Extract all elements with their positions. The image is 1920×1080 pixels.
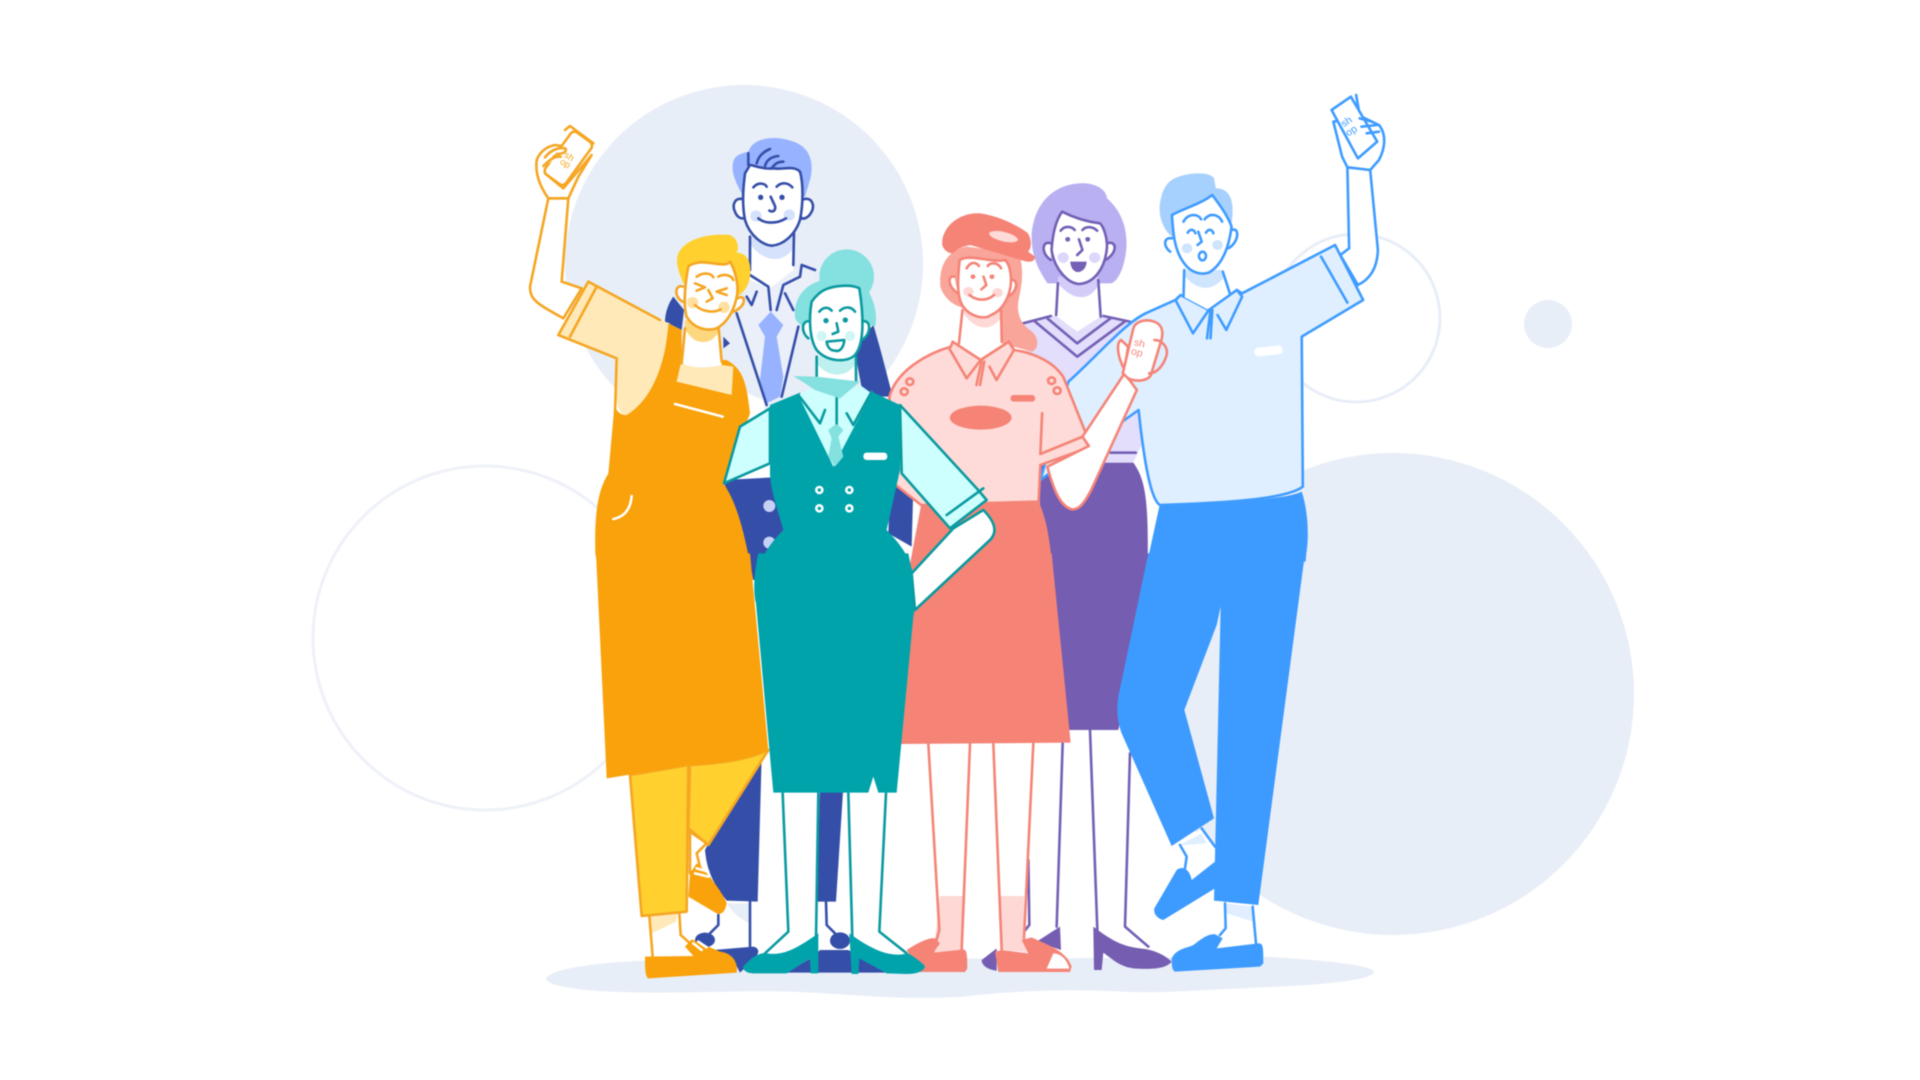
phone label: sh — [562, 150, 576, 163]
phone label: sh — [1339, 115, 1355, 130]
phone label: op — [1344, 124, 1360, 139]
phone label: op — [558, 156, 572, 170]
person: woman in purple skirt (back) — [982, 183, 1172, 971]
background circle: right filled — [1152, 453, 1634, 935]
background circle: small dot — [1524, 300, 1572, 348]
phone label: sh — [1133, 337, 1146, 351]
phone label: op — [1130, 346, 1144, 360]
person: woman in coral skirt holding phone — [889, 213, 1167, 972]
background circle: right outline — [1272, 234, 1440, 402]
background circle: top filled — [565, 85, 923, 443]
person: woman in teal vest (front) — [724, 249, 994, 974]
person: man in navy suit (back) — [665, 138, 913, 973]
person: man in orange apron raising phone — [530, 126, 768, 978]
ground shadow — [546, 957, 1374, 998]
person: man in blue shirt raising phone — [1040, 95, 1384, 972]
background circle: left outline — [313, 466, 657, 810]
